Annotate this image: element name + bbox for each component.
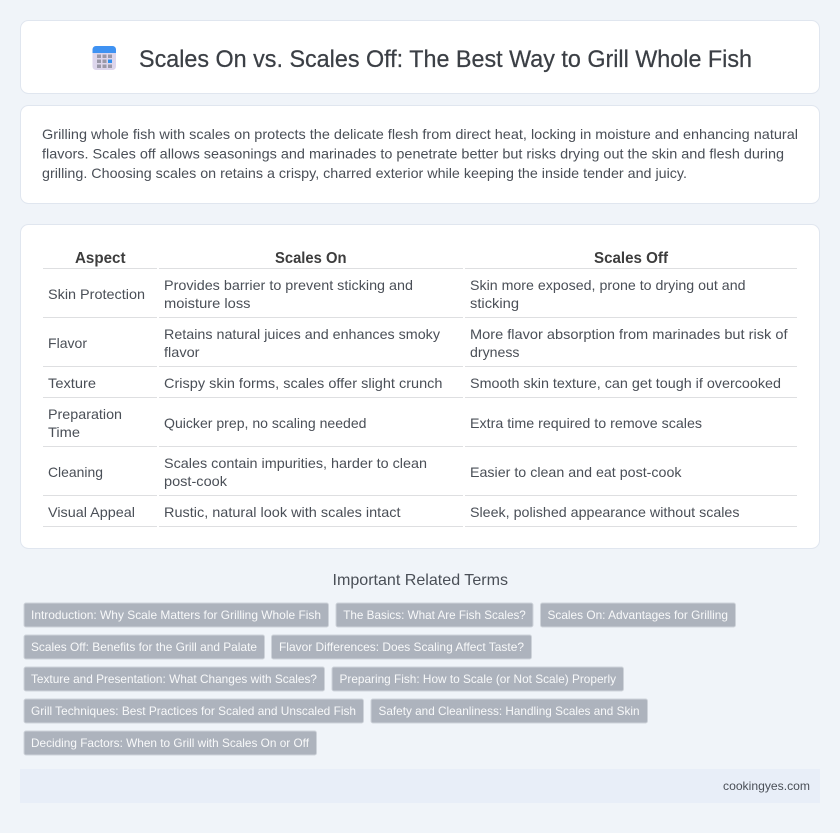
row: texture: Crispy skin forms, scales offer slight crunch (164, 375, 442, 391)
row: skin protection: sticking (470, 295, 519, 311)
row: visual appeal (48, 504, 740, 520)
heading: important related terms: Important Related Terms (332, 572, 508, 589)
row: cleaning: post-cook (164, 473, 228, 489)
text block: introduction: grilling. Choosing scales on retains a crispy, charred exterior while keeping the inside tender and juicy. (42, 165, 687, 181)
row: visual appeal: Sleek, polished appearance without scales (470, 504, 740, 520)
text block: introduction: flavors. Scales off allows seasonings and marinades to penetrate better but risks drying out the skin and flesh during (42, 146, 784, 162)
tag: Texture and Presentation: What Changes with Scales? (31, 672, 317, 686)
row: flavor: flavor (164, 344, 200, 360)
tag: Safety and Cleanliness: Handling Scales and Skin (378, 704, 640, 718)
tag (336, 603, 533, 627)
row: preparation time: Time (48, 424, 80, 440)
tag: Scales Off: Benefits for the Grill and Palate (31, 640, 257, 654)
row: flavor: Retains natural juices and enhances smoky (164, 326, 440, 342)
row: preparation time (48, 406, 702, 440)
tag (24, 635, 264, 659)
related terms tags (24, 603, 736, 755)
row: cleaning: Scales contain impurities, harder to clean (164, 455, 427, 471)
row: flavor: dryness (470, 344, 520, 360)
footer source text: cookingyes.com (723, 779, 810, 793)
tag: Flavor Differences: Does Scaling Affect Taste? (279, 640, 524, 654)
row: visual appeal: Visual Appeal (48, 504, 135, 520)
tag (332, 667, 624, 691)
row: cleaning: Easier to clean and eat post-cook (470, 464, 683, 480)
table header: Scales Off (594, 250, 669, 267)
row: flavor: Flavor (48, 335, 87, 351)
row: visual appeal: Rustic, natural look with scales intact (164, 504, 401, 520)
row: texture (48, 375, 781, 391)
tag (272, 635, 532, 659)
text block: introduction: Grilling whole fish with scales on protects the delicate flesh from direct heat, locking in moisture and enhancing natural (42, 126, 798, 142)
tag (540, 603, 736, 627)
tag (24, 667, 324, 691)
tag (24, 699, 364, 723)
table header: Scales On (275, 250, 346, 267)
tag: Introduction: Why Scale Matters for Grilling Whole Fish (31, 608, 321, 622)
tag: Preparing Fish: How to Scale (or Not Scale) Properly (340, 672, 616, 686)
tag: Grill Techniques: Best Practices for Scaled and Unscaled Fish (31, 704, 356, 718)
row: cleaning (48, 455, 683, 489)
row: skin protection: Skin Protection (48, 286, 145, 302)
footer (20, 769, 820, 803)
row: preparation time: Quicker prep, no scaling needed (164, 415, 366, 431)
row: cleaning: Cleaning (48, 464, 103, 480)
row: flavor (48, 326, 788, 360)
row: flavor: More flavor absorption from marinades but risk of (470, 326, 788, 342)
panel: header (20, 20, 820, 94)
tag: Deciding Factors: When to Grill with Scales On or Off (31, 736, 310, 750)
tag: The Basics: What Are Fish Scales? (343, 608, 526, 622)
panel: introduction (20, 106, 820, 204)
row: texture: Smooth skin texture, can get tough if overcooked (470, 375, 781, 391)
row: preparation time: Preparation (48, 406, 122, 422)
table header: Aspect (75, 250, 126, 267)
row: texture: Texture (48, 375, 96, 391)
panel: comparison table (20, 224, 820, 548)
row: skin protection: moisture loss (164, 295, 250, 311)
tag: Scales On: Advantages for Grilling (548, 608, 728, 622)
tag (24, 603, 328, 627)
row: skin protection: Skin more exposed, prone to drying out and (470, 277, 746, 293)
table row lines (43, 268, 797, 527)
tag (24, 731, 316, 755)
icon: calendar (92, 46, 116, 70)
row: preparation time: Extra time required to remove scales (470, 415, 702, 431)
row: skin protection: Provides barrier to prevent sticking and (164, 277, 413, 293)
tag (371, 699, 648, 723)
row: skin protection (48, 277, 746, 311)
text block: introduction (42, 126, 798, 181)
table header (75, 250, 669, 267)
title: Scales On vs. Scales Off: The Best Way to Grill Whole Fish (139, 46, 752, 73)
